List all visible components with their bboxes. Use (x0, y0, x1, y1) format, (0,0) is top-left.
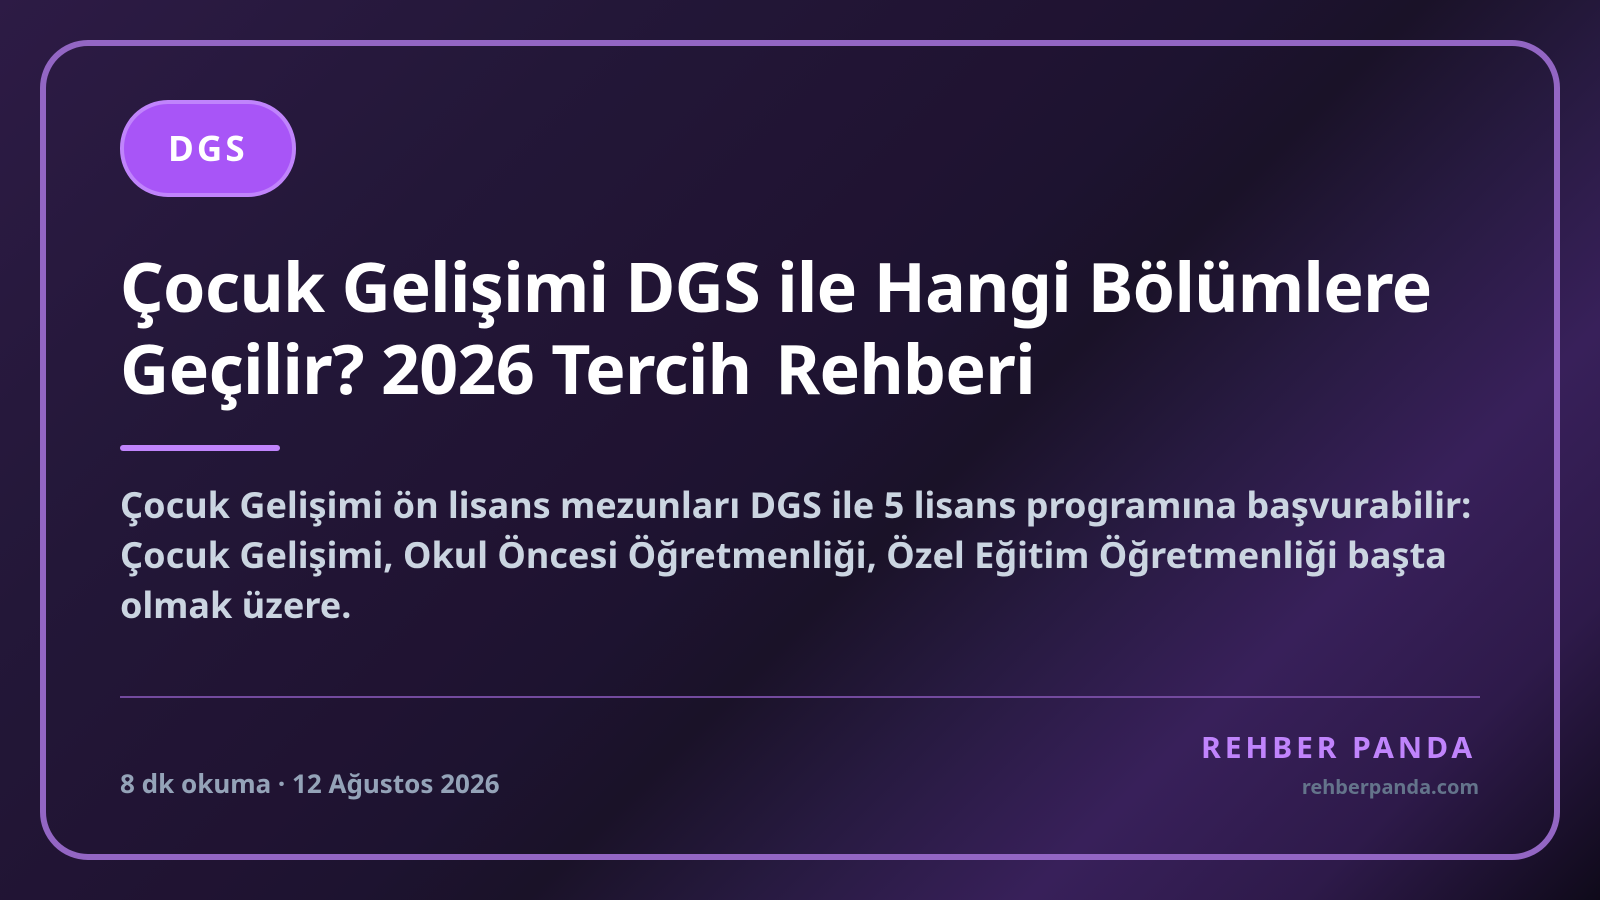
badge: DGS (120, 100, 296, 197)
title (120, 239, 1432, 414)
brand name: REHBER PANDA (1201, 726, 1476, 767)
description (120, 480, 1471, 629)
description: olmak üzere. (120, 580, 351, 629)
footer divider (120, 696, 1480, 698)
badge: DGS: DGS (168, 125, 248, 172)
reading time and date: 8 dk okuma · 12 Ağustos 2026 (120, 765, 500, 801)
title: Geçilir? 2026 Tercih Rehberi (120, 321, 1035, 414)
description: Çocuk Gelişimi, Okul Öncesi Öğretmenliği, Özel Eğitim Öğretmenliği başta (120, 530, 1447, 579)
accent bar (120, 445, 280, 451)
description: Çocuk Gelişimi ön lisans mezunları DGS ile 5 lisans programına başvurabilir: (120, 480, 1471, 529)
website: rehberpanda.com (1302, 773, 1479, 800)
title: Çocuk Gelişimi DGS ile Hangi Bölümlere (120, 239, 1432, 332)
